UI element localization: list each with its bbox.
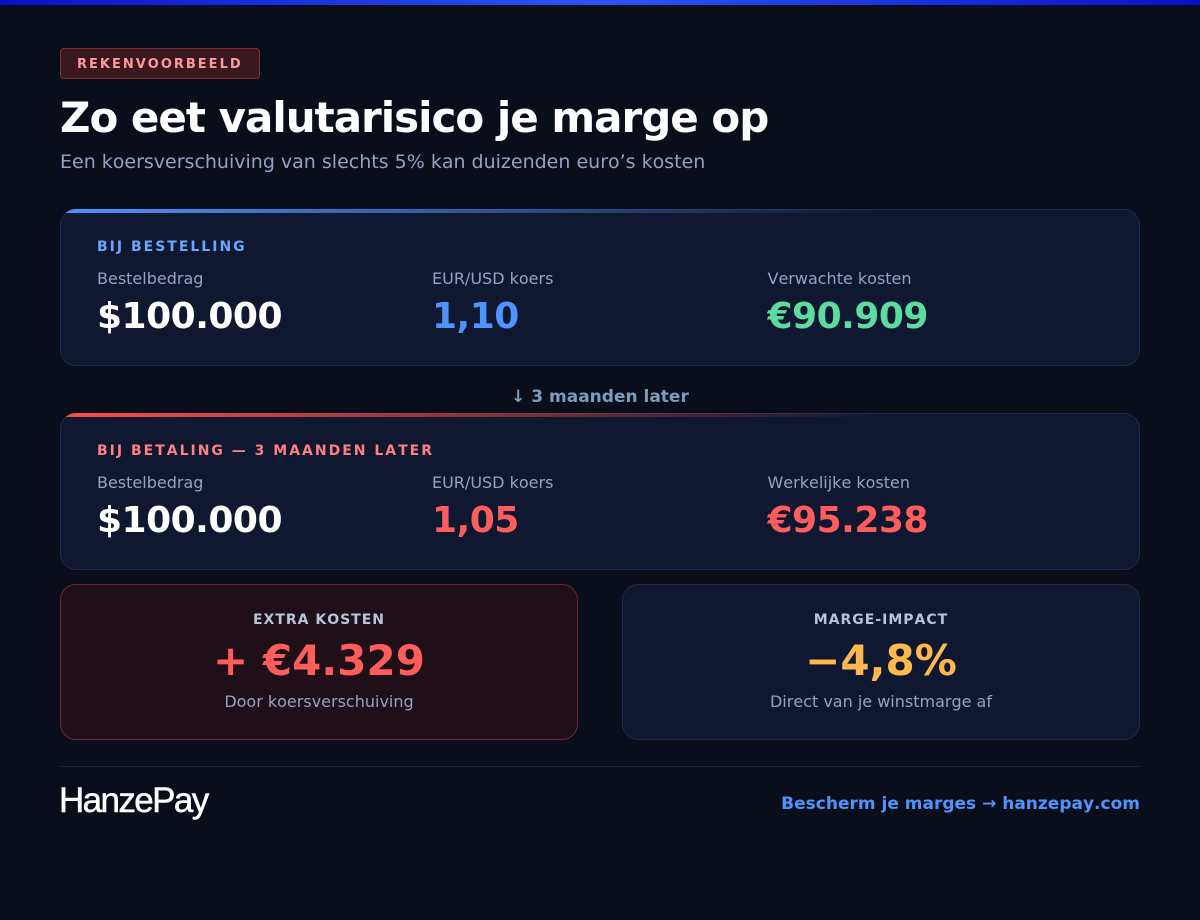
stat: verwachte kosten: €90.909	[767, 296, 928, 337]
stat: bestelbedrag	[97, 269, 282, 337]
panel: extra kosten	[60, 584, 578, 740]
subtitle: Een koersverschuiving van slechts 5% kan duizenden euro’s kosten	[60, 151, 705, 173]
badge	[60, 48, 260, 79]
stat: verwachte kosten: Verwachte kosten	[767, 269, 912, 288]
panel heading: BIJ BESTELLING	[97, 239, 247, 255]
stat: werkelijke kosten: Werkelijke kosten	[767, 473, 910, 492]
badge: REKENVOORBEELD	[77, 57, 243, 72]
note: Door koersverschuiving	[224, 692, 414, 711]
stat: werkelijke kosten	[766, 473, 928, 541]
note: Direct van je winstmarge af	[770, 692, 992, 711]
stat: koers: 1,05	[432, 500, 519, 541]
label: MARGE-IMPACT	[814, 612, 948, 628]
stat: bestelbedrag: $100.000	[97, 500, 282, 541]
stat: verwachte kosten	[766, 269, 928, 337]
panel heading: BIJ BETALING — 3 MAANDEN LATER	[97, 443, 434, 459]
stat: bestelbedrag	[97, 473, 282, 541]
title: Zo eet valutarisico je marge op	[60, 93, 768, 142]
value: + €4.329	[213, 636, 425, 685]
top accent bar	[0, 0, 1200, 5]
panel: marge-impact	[622, 584, 1140, 740]
value: −4,8%	[805, 636, 957, 685]
stat: werkelijke kosten: €95.238	[767, 500, 928, 541]
call to action: Bescherm je marges → hanzepay.com	[781, 794, 1140, 814]
stat: bestelbedrag: $100.000	[97, 296, 282, 337]
stat: koers: 1,10	[432, 296, 519, 337]
stat: koers	[432, 473, 553, 541]
stat: bestelbedrag: Bestelbedrag	[97, 269, 203, 288]
stat: koers: EUR/USD koers	[432, 269, 553, 288]
panel: bij betaling	[60, 413, 1140, 570]
arrow label: ↓ 3 maanden later	[511, 387, 689, 407]
stat: bestelbedrag: Bestelbedrag	[97, 473, 203, 492]
label: EXTRA KOSTEN	[253, 612, 385, 628]
panel accent	[60, 413, 1140, 417]
logo: HanzePay	[59, 781, 208, 820]
panel accent	[60, 209, 1140, 213]
stat: koers: EUR/USD koers	[432, 473, 553, 492]
footer divider	[60, 766, 1140, 767]
stat: koers	[432, 269, 553, 337]
panel: bij bestelling	[60, 209, 1140, 366]
